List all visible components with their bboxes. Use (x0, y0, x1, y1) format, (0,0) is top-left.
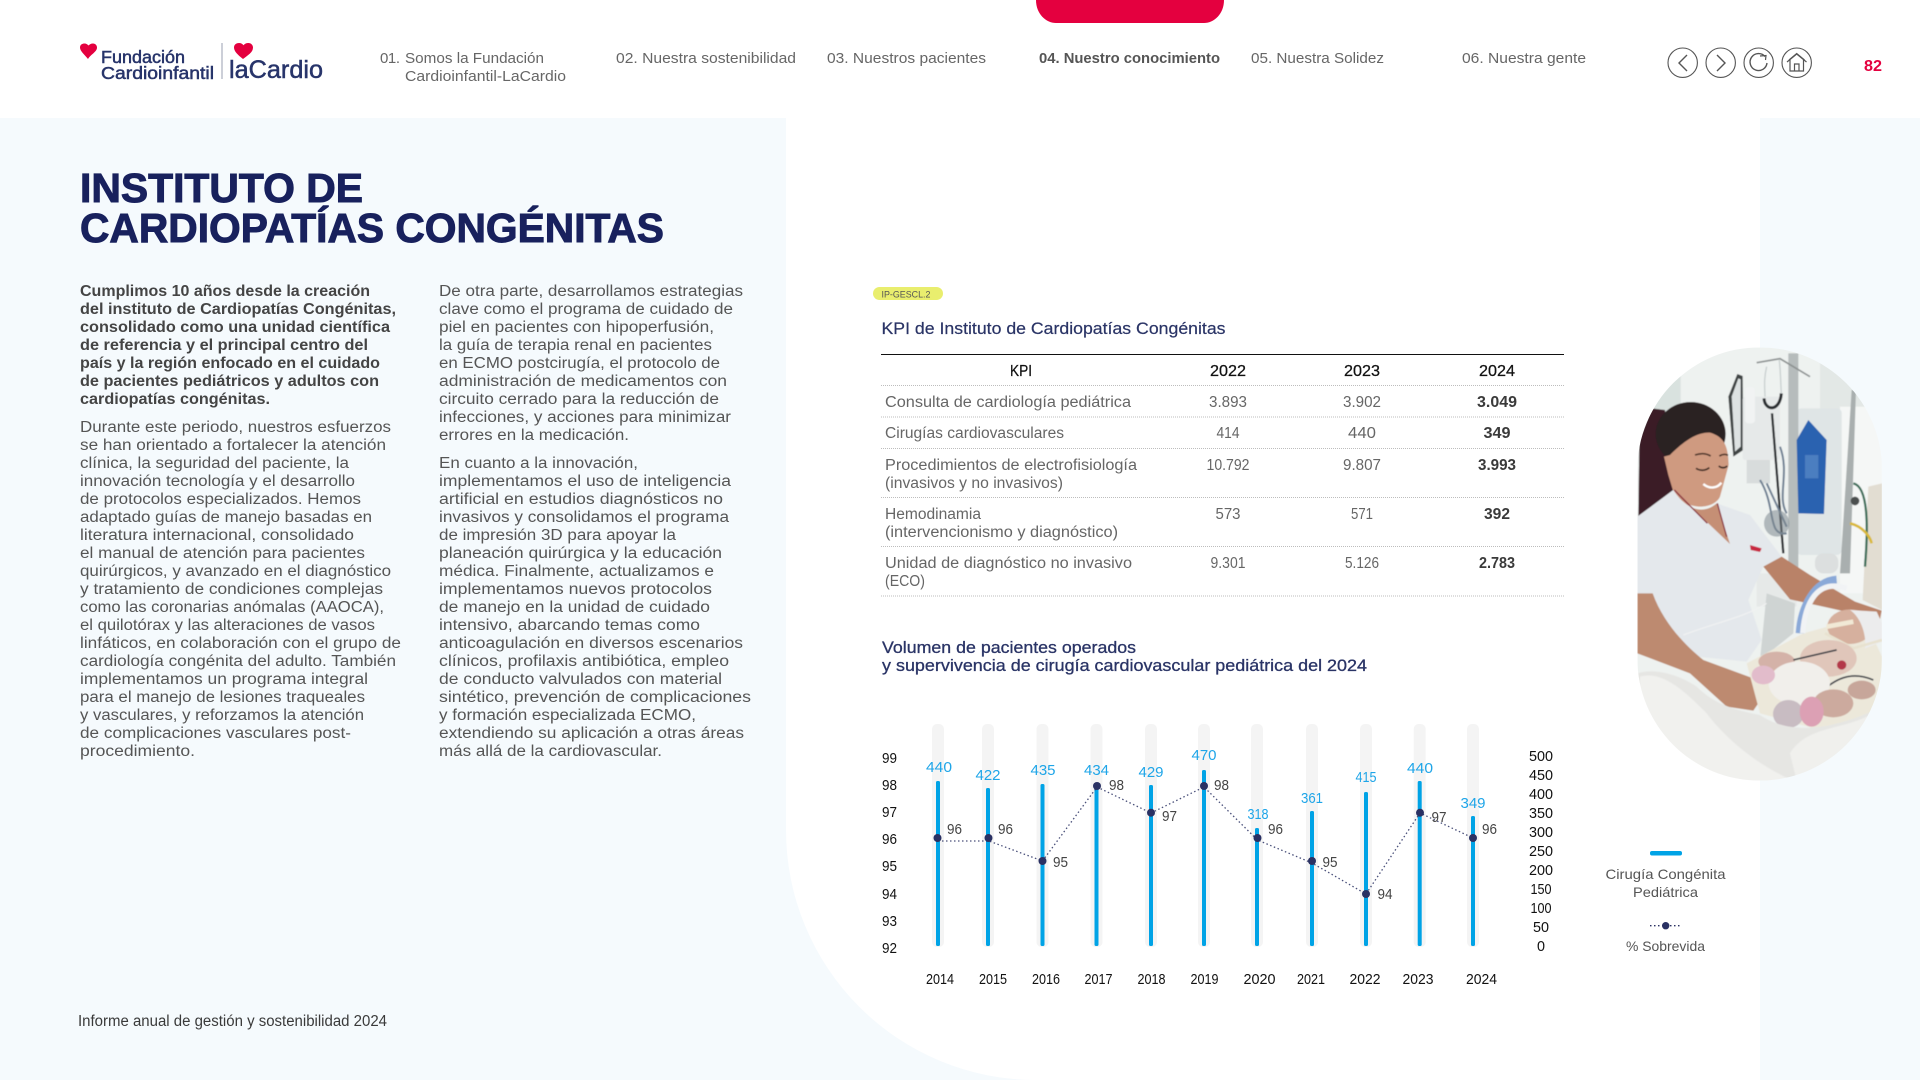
row: electrofisiología: 3.993 (1478, 457, 1516, 474)
right axis: patients: 150 (1530, 881, 1552, 898)
survival dotted line (938, 787, 1473, 894)
nav item 01 (380, 50, 566, 85)
bar value labels (926, 747, 1486, 823)
bar value labels: 415 (1356, 769, 1376, 786)
row: consulta: 3.893 (1209, 394, 1247, 411)
logo: Fundación Cardioinfantil and laCardio: laCardio (229, 56, 323, 84)
text block: second paragraph column one: quirúrgicos, y avanzado en el diagnóstico (80, 563, 391, 580)
text block: second paragraph column two: artificial en estudios diagnósticos no (439, 491, 723, 508)
title: INSTITUTO DE (80, 165, 363, 211)
text block: second paragraph column one: el quilotórax y las alteraciones de vasos (80, 617, 375, 634)
x axis: years: 2023 (1402, 971, 1434, 988)
legend item: survival: % Sobrevida (1626, 938, 1705, 954)
nav item 01: Somos la Fundación (405, 50, 544, 67)
active section tab (1036, 0, 1224, 23)
table header row: 2024 (1479, 363, 1515, 380)
left axis: survival percent (882, 750, 897, 957)
text block: intro paragraph: de referencia y el principal centro del (80, 337, 368, 354)
text block: second paragraph column two: de conducto valvulados con material (439, 671, 722, 688)
text block: intro paragraph: país y la región enfocado en el cuidado (80, 355, 380, 372)
text block: second paragraph column one (80, 419, 401, 760)
x axis: years: 2022 (1350, 971, 1380, 988)
text block: second paragraph column one: cardiología congénita del adulto. También (80, 653, 396, 670)
row: hemodinamia: 571 (1351, 506, 1373, 523)
text block: second paragraph column one: y tratamiento de condiciones complejas (80, 581, 383, 598)
right axis: patients: 500 (1529, 748, 1553, 765)
x axis: years: 2014 (926, 971, 954, 988)
bar value labels: 349 (1460, 795, 1486, 812)
icon: home (1782, 48, 1811, 77)
survival value labels: 95 (1322, 854, 1338, 871)
text block: first paragraph column two: infecciones, y acciones para minimizar (439, 409, 731, 426)
chart heading (882, 638, 1367, 675)
text block: second paragraph column two: y formación especializada ECMO, (439, 707, 696, 724)
bars: cirugía congénita pediátrica (936, 770, 1475, 946)
text block: second paragraph column one: de protocolos especializados. Hemos (80, 491, 361, 508)
text block: intro paragraph (80, 283, 396, 408)
x axis: years: 2016 (1032, 971, 1060, 988)
bar value labels: 440 (926, 759, 952, 776)
row: ECO: 5.126 (1345, 555, 1379, 572)
tag: IP-GESCL.2 (873, 287, 943, 300)
nav item 05: 05. Nuestra Solidez (1251, 50, 1384, 67)
text block: second paragraph column two: intensivo, abarcando temas como (439, 617, 700, 634)
table header row: KPI (1010, 363, 1032, 380)
text block: first paragraph column two: la guía de terapia renal en pacientes (439, 337, 712, 354)
survival value labels: 97 (1162, 808, 1177, 825)
text block: intro paragraph: del instituto de Cardiopatías Congénitas, (80, 301, 396, 318)
bar tracks (932, 724, 1479, 947)
row: electrofisiología: Procedimientos de electrofisiología (885, 457, 1137, 474)
text block: second paragraph column one: innovación tecnología y el desarrollo (80, 473, 355, 490)
nav item 03: 03. Nuestros pacientes (827, 50, 986, 67)
row: cirugías: 414 (1216, 425, 1240, 442)
x axis: years: 2015 (979, 971, 1007, 988)
row: hemodinamia: Hemodinamia (885, 506, 981, 523)
text block: second paragraph column one: se han orientado a fortalecer la atención (80, 437, 386, 454)
text block: second paragraph column one: y vasculares, y reforzamos la atención (80, 707, 364, 724)
right axis: patients: 450 (1529, 767, 1553, 784)
survival value labels: 96 (1482, 821, 1497, 838)
text block: second paragraph column two: extendiendo su aplicación a otras áreas (439, 725, 744, 742)
text block: second paragraph column one: linfáticos, en colaboración con el grupo de (80, 635, 401, 652)
logo: Fundación Cardioinfantil and laCardio (80, 43, 323, 84)
row: electrofisiología: 9.807 (1343, 457, 1381, 474)
text block: second paragraph column one: procedimiento. (80, 743, 195, 760)
bar value labels: 422 (976, 767, 1000, 784)
text block: first paragraph column two: administración de medicamentos con (439, 373, 727, 390)
text block: second paragraph column two: sintético, prevención de complicaciones (439, 689, 751, 706)
right axis: patients (1529, 748, 1553, 955)
left axis: survival percent: 98 (882, 777, 897, 794)
row: hemodinamia: 573 (1216, 506, 1240, 523)
row: consulta: 3.049 (1477, 394, 1517, 411)
text block: second paragraph column one: adaptado guías de manejo basadas en (80, 509, 372, 526)
text block: second paragraph column two: de impresión 3D para apoyar la (439, 527, 676, 544)
row: cirugías: 349 (1484, 425, 1511, 442)
nav item 01: 01. (380, 50, 400, 67)
left axis: survival percent: 95 (882, 858, 897, 875)
nav item 06: 06. Nuestra gente (1462, 50, 1586, 67)
left axis: survival percent: 96 (882, 831, 897, 848)
text block: intro paragraph: cardiopatías congénitas. (80, 391, 270, 408)
text block: second paragraph column one: literatura internacional, consolidado (80, 527, 354, 544)
survival value labels: 98 (1109, 777, 1124, 794)
text block: second paragraph column two: médica. Finalmente, actualizamos e (439, 563, 714, 580)
left axis: survival percent: 94 (882, 886, 897, 903)
right axis: patients: 100 (1530, 900, 1552, 917)
row: hemodinamia: 392 (1484, 506, 1510, 523)
survival value labels: 98 (1214, 777, 1229, 794)
logo: Fundación Cardioinfantil and laCardio: Fundación (101, 47, 185, 67)
logo: Fundación Cardioinfantil and laCardio: Cardioinfantil (101, 63, 214, 83)
text block: second paragraph column two: más allá de la cardiovascular. (439, 743, 662, 760)
row: cirugías: 440 (1348, 425, 1376, 442)
title (80, 165, 664, 251)
right axis: patients: 250 (1529, 843, 1553, 860)
row: electrofisiología: (invasivos y no invasivos) (885, 475, 1063, 492)
right axis: patients: 0 (1537, 938, 1545, 955)
row: hemodinamia (885, 506, 1510, 541)
text block: first paragraph column two: clave como el programa de cuidado de (439, 301, 733, 318)
x axis: years (926, 971, 1497, 988)
survival value labels: 96 (998, 821, 1013, 838)
x axis: years: 2017 (1084, 971, 1112, 988)
text block: second paragraph column one: para el manejo de lesiones traqueales (80, 689, 365, 706)
survival dots (934, 782, 1477, 898)
left axis: survival percent: 92 (882, 940, 897, 957)
text block: second paragraph column one: como las coronarias anómalas (AAOCA), (80, 599, 384, 616)
icon: reload (1744, 48, 1773, 77)
text block: intro paragraph: consolidado como una unidad científica (80, 319, 390, 336)
survival value labels: 97 (1432, 809, 1446, 826)
page number: 82 (1864, 58, 1882, 75)
right axis: patients: 50 (1533, 919, 1549, 936)
right axis: patients: 400 (1529, 786, 1553, 803)
navigation menu (380, 50, 1586, 85)
x axis: years: 2018 (1138, 971, 1166, 988)
row: electrofisiología: 10.792 (1206, 457, 1250, 474)
text block: intro paragraph: de pacientes pediátricos y adultos con (80, 373, 379, 390)
text block: second paragraph column two: En cuanto a la innovación, (439, 455, 638, 472)
nav item 04 active: 04. Nuestro conocimiento (1039, 50, 1220, 67)
left axis: survival percent: 99 (882, 750, 897, 767)
text block: second paragraph column two: implementamos nuevos protocolos (439, 581, 712, 598)
photo: nurse with baby, drawn as capsule illustration (1637, 347, 1882, 781)
left axis: survival percent: 93 (882, 913, 897, 930)
row: consulta: 3.902 (1343, 394, 1381, 411)
icon: back arrow (1668, 48, 1697, 77)
text block: second paragraph column one: de complicaciones vasculares post- (80, 725, 351, 742)
bar value labels: 361 (1301, 790, 1323, 807)
text block: first paragraph column two: en ECMO postcirugía, el protocolo de (439, 355, 720, 372)
text block: first paragraph column two: De otra parte, desarrollamos estrategias (439, 283, 743, 300)
text block: second paragraph column two: de manejo en la unidad de cuidado (439, 599, 710, 616)
text block: first paragraph column two: errores en la medicación. (439, 427, 629, 444)
text block: second paragraph column one: clínica, la seguridad del paciente, la (80, 455, 349, 472)
text block: first paragraph column two: piel en pacientes con hipoperfusión, (439, 319, 714, 336)
survival value labels (947, 777, 1497, 903)
text block: second paragraph column one: Durante este periodo, nuestros esfuerzos (80, 419, 391, 436)
chart heading: y supervivencia de cirugía cardiovascular pediátrica del 2024 (882, 656, 1367, 675)
row: consulta: Consulta de cardiología pediátrica (885, 394, 1131, 411)
text block: second paragraph column two: implementamos el uso de inteligencia (439, 473, 731, 490)
icon: forward arrow (1706, 48, 1735, 77)
text block: first paragraph column two: circuito cerrado para la reducción de (439, 391, 719, 408)
chart: patients operated and survival (882, 724, 1553, 988)
text block: intro paragraph: Cumplimos 10 años desde la creación (80, 283, 370, 300)
row: electrofisiología (885, 457, 1516, 492)
navigation icons (1668, 48, 1811, 77)
table: KPI (881, 354, 1564, 596)
chart heading: Volumen de pacientes operados (882, 638, 1136, 657)
legend item: bars (1606, 851, 1726, 900)
survival value labels: 95 (1053, 854, 1068, 871)
text block: first paragraph column two (439, 283, 743, 444)
text block: second paragraph column two: planeación quirúrgica y la educación (439, 545, 722, 562)
bar value labels: 429 (1138, 764, 1164, 781)
row: ECO: 2.783 (1479, 555, 1515, 572)
x axis: years: 2020 (1244, 971, 1276, 988)
row: ECO: (ECO) (885, 573, 925, 590)
row: cirugías (885, 425, 1511, 442)
legend (1606, 851, 1726, 954)
bar value labels: 318 (1248, 806, 1268, 823)
row: hemodinamia: (intervencionismo y diagnóstico) (885, 524, 1118, 541)
text block: second paragraph column one: implementamos un programa integral (80, 671, 368, 688)
survival value labels: 96 (947, 821, 962, 838)
bar value labels: 434 (1084, 762, 1109, 779)
legend item: bars: Pediátrica (1633, 884, 1698, 900)
row: ECO: Unidad de diagnóstico no invasivo (885, 555, 1132, 572)
tag: IP-GESCL.2: IP-GESCL.2 (882, 290, 930, 300)
left axis: survival percent: 97 (882, 804, 897, 821)
footer note: Informe anual de gestión y sostenibilidad 2024 (78, 1013, 387, 1030)
title: CARDIOPATÍAS CONGÉNITAS (80, 205, 664, 251)
x axis: years: 2021 (1297, 971, 1325, 988)
bar value labels: 435 (1030, 762, 1056, 779)
right axis: patients: 200 (1529, 862, 1553, 879)
bar value labels: 440 (1407, 760, 1433, 777)
row: cirugías: Cirugías cardiovasculares (885, 425, 1064, 442)
text block: second paragraph column two: anticoagulación en diversos escenarios (439, 635, 743, 652)
right axis: patients: 300 (1529, 824, 1553, 841)
nav item 01: Cardioinfantil-LaCardio (405, 68, 566, 85)
right axis: patients: 350 (1529, 805, 1553, 822)
row: consulta (885, 394, 1517, 411)
table header row: 2022 (1210, 363, 1246, 380)
table heading: KPI de Instituto de Cardiopatías Congénitas (882, 319, 1226, 338)
x axis: years: 2024 (1466, 971, 1497, 988)
text block: second paragraph column one: el manual de atención para pacientes (80, 545, 365, 562)
row: ECO (885, 555, 1515, 590)
row: ECO: 9.301 (1210, 555, 1246, 572)
nav item 02: 02. Nuestra sostenibilidad (616, 50, 796, 67)
table header row: 2023 (1344, 363, 1380, 380)
legend item: bars: Cirugía Congénita (1606, 866, 1726, 882)
survival value labels: 94 (1378, 886, 1392, 903)
text block: second paragraph column two: invasivos y consolidamos el programa (439, 509, 729, 526)
bar value labels: 470 (1192, 747, 1216, 764)
text block: second paragraph column two (439, 455, 751, 760)
x axis: years: 2019 (1190, 971, 1218, 988)
survival value labels: 96 (1268, 821, 1283, 838)
text block: second paragraph column two: clínicos, profilaxis antibiótica, empleo (439, 653, 729, 670)
table header row (1010, 363, 1515, 380)
